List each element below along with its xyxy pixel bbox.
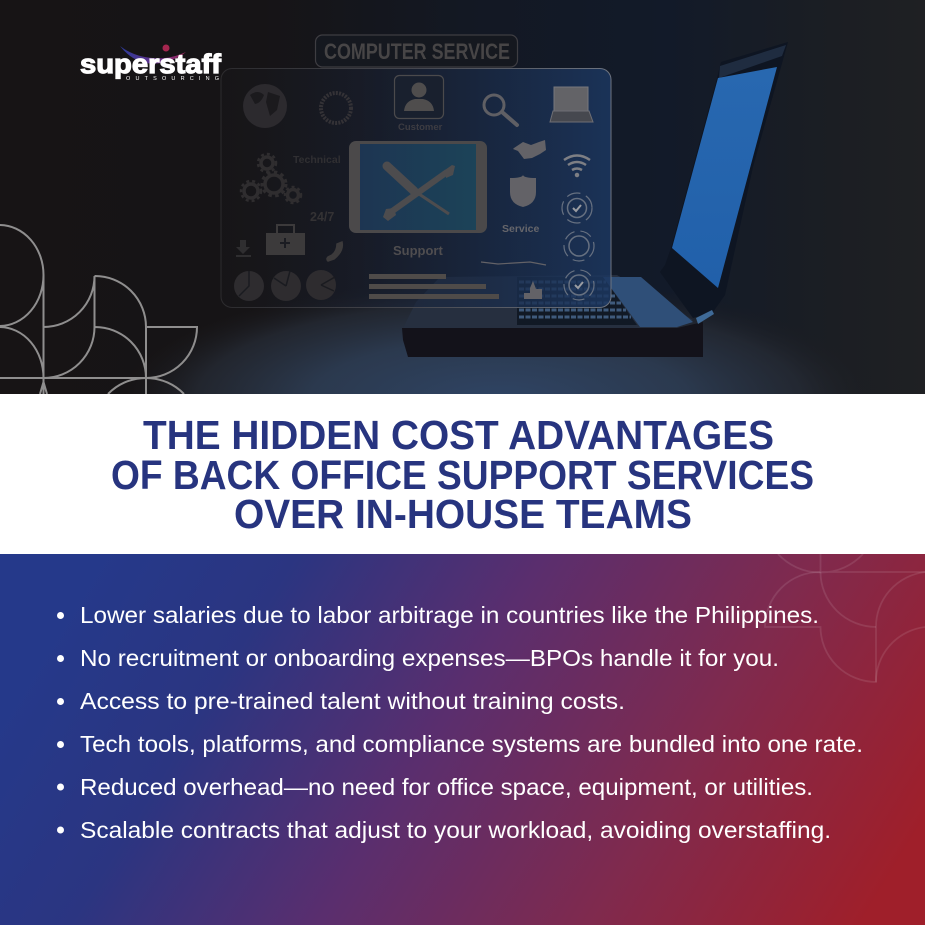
icon: mini laptop [550, 87, 593, 122]
item 5: Reduced overhead—no need for office space, equipment, or utilities. [80, 774, 813, 800]
logo tagline: OUTSOURCING [126, 76, 219, 82]
icon: handshake [513, 140, 546, 159]
decorative geometric lines right [765, 554, 925, 682]
header photo panel [0, 0, 925, 394]
sparkline [481, 262, 546, 265]
table surface [0, 280, 925, 394]
icon: first aid kit [266, 225, 305, 255]
label: 24/7: 24/7 [310, 210, 334, 224]
icon: pie charts [234, 270, 336, 301]
holographic panel: computer service [221, 35, 611, 308]
logo: superstaff outsourcing [80, 44, 222, 82]
label: customer: Customer [398, 122, 443, 133]
icon: wifi [564, 156, 590, 176]
icon: phone [327, 242, 342, 261]
title: OF BACK OFFICE SUPPORT SERVICES [111, 452, 814, 498]
title: THE HIDDEN COST ADVANTAGES [143, 412, 774, 458]
item 2: No recruitment or onboarding expenses—BPOs handle it for you. [80, 645, 779, 671]
icon: magnifier [484, 95, 517, 125]
icon: tablet with tools [349, 141, 487, 233]
bullet list [57, 602, 863, 843]
icon: gears [241, 154, 301, 203]
item 1: Lower salaries due to labor arbitrage in countries like the Philippines. [80, 602, 819, 628]
title [111, 412, 814, 537]
title band [0, 394, 925, 554]
title: OVER IN-HOUSE TEAMS [234, 491, 692, 537]
icon: thumbs up [524, 281, 542, 299]
item 4: Tech tools, platforms, and compliance systems are bundled into one rate. [80, 731, 863, 757]
icon: customer [394, 76, 444, 118]
icon: shield [510, 175, 536, 207]
item 6: Scalable contracts that adjust to your workload, avoiding overstaffing. [80, 817, 831, 843]
holographic panel: computer service: COMPUTER SERVICE [324, 39, 510, 64]
icon: text bars [369, 274, 499, 299]
icon: refresh ring [321, 93, 351, 123]
logo dot [162, 44, 170, 52]
laptop [402, 42, 788, 357]
icon: download [236, 240, 251, 257]
icon: globe [243, 84, 287, 128]
benefits panel [0, 554, 925, 925]
logo wordmark: superstaff [80, 49, 222, 79]
label: service: Service [502, 223, 540, 235]
icon: status checks [562, 193, 594, 300]
logo swoosh [120, 46, 186, 64]
label: support: Support [393, 243, 443, 258]
item 3: Access to pre-trained talent without training costs. [80, 688, 625, 714]
label: technical: Technical [293, 154, 341, 166]
decorative geometric lines left [0, 225, 197, 394]
